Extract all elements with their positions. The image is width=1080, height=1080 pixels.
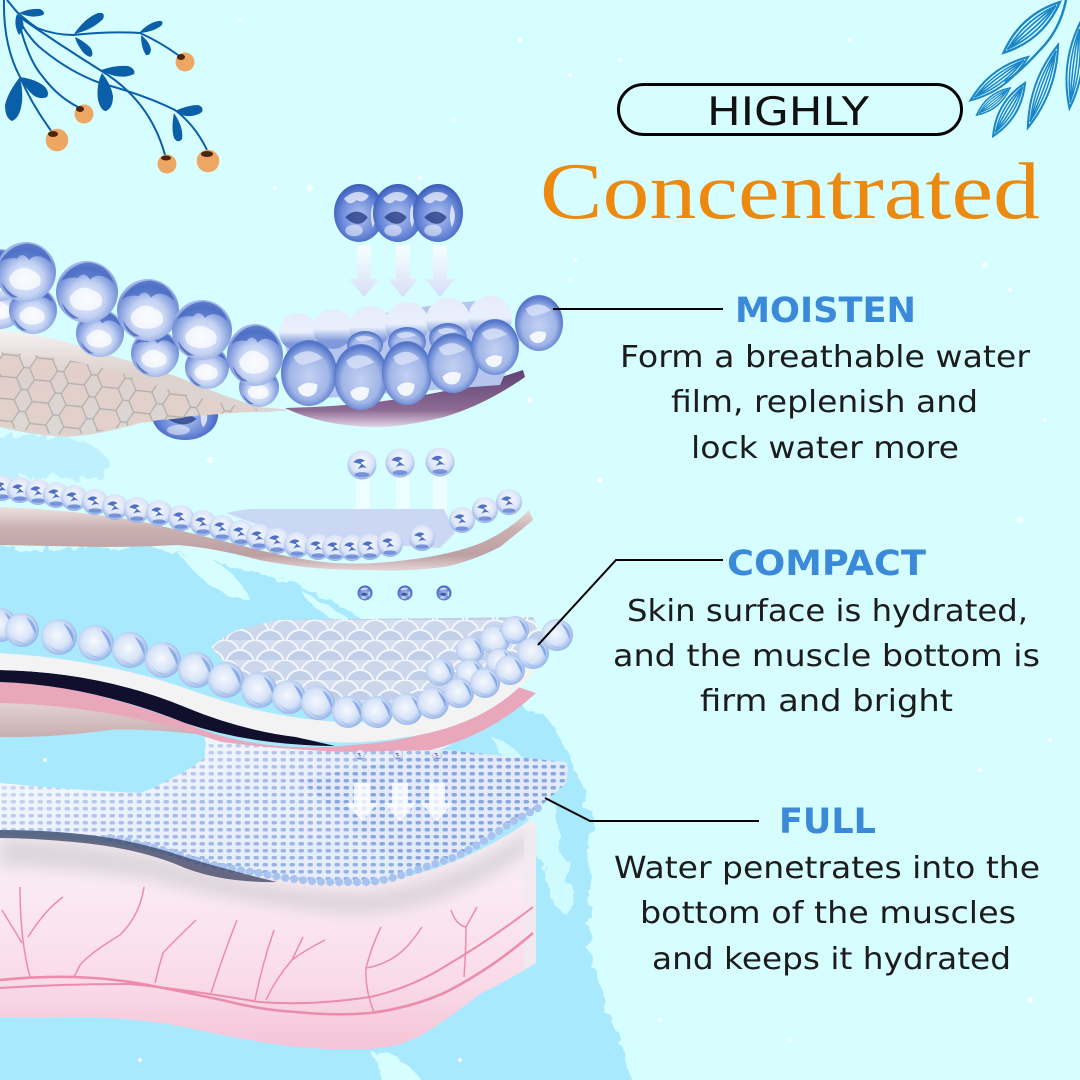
lavender panel: [226, 509, 455, 548]
callout text: full: and keeps it hydrated: [652, 942, 1011, 977]
bead edge: [110, 807, 540, 882]
tiny beads: [355, 750, 442, 760]
callout text: moisten: MOISTEN: [735, 291, 916, 331]
icon: berry branch top left: [4, 0, 219, 174]
dark band: [0, 670, 335, 746]
callout text: full: bottom of the muscles: [640, 896, 1016, 931]
callout text: compact: COMPACT: [727, 544, 926, 584]
membrane: [0, 507, 533, 571]
upper scale rows: [211, 617, 545, 702]
icon: line-art leaves top right: [966, 0, 1080, 140]
callout text: moisten: Form a breathable water: [620, 340, 1031, 375]
layer 1: large water beads: [0, 184, 563, 440]
white band under pink: [205, 735, 470, 762]
pink layer: [0, 682, 536, 760]
callout text: compact: firm and bright: [700, 684, 953, 719]
callout text: full: [614, 802, 1040, 977]
falling beads and arrows: [334, 184, 463, 297]
callout line: full: [545, 798, 759, 821]
layer 3: dense beads with dark and pink layers: [0, 586, 573, 762]
drop under membrane: [152, 390, 218, 440]
rising beads and columns: [348, 448, 454, 533]
membrane: hexagon skin: [0, 330, 292, 437]
white skin layer: [0, 653, 536, 742]
callout text: moisten: [620, 291, 1031, 466]
dark underside: [0, 830, 277, 882]
bead row: [0, 475, 522, 561]
tiny beads: [358, 586, 452, 600]
callout line: compact: [538, 560, 723, 645]
white arrows in mesh: [346, 783, 453, 821]
heading pill: HIGHLY: [618, 84, 962, 135]
callout text: full: FULL: [779, 802, 876, 842]
callout text: moisten: film, replenish and: [671, 385, 978, 420]
purple underside: [285, 370, 525, 427]
layer 5: pink muscle block with veins: [0, 820, 536, 1049]
main vessels: [0, 887, 533, 1014]
callout text: compact: [613, 544, 1040, 719]
layer 2: small beads on thin membrane: [0, 448, 533, 571]
grey pink base: [0, 700, 205, 737]
layer 4: mesh of water micro beads: [0, 740, 568, 882]
callout line: moisten: [553, 308, 723, 310]
bead row: [0, 608, 573, 728]
background wash: blue brush stroke: [0, 434, 640, 1080]
back row beads: [0, 242, 563, 410]
title: Concentrated: Concentrated: [540, 146, 1040, 236]
callout text: full: Water penetrates into the: [614, 851, 1040, 886]
callout text: compact: Skin surface is hydrated,: [627, 594, 1028, 629]
heading pill: HIGHLY: HIGHLY: [707, 90, 869, 135]
callout text: compact: and the muscle bottom is: [613, 639, 1040, 674]
callout text: moisten: lock water more: [691, 431, 959, 466]
